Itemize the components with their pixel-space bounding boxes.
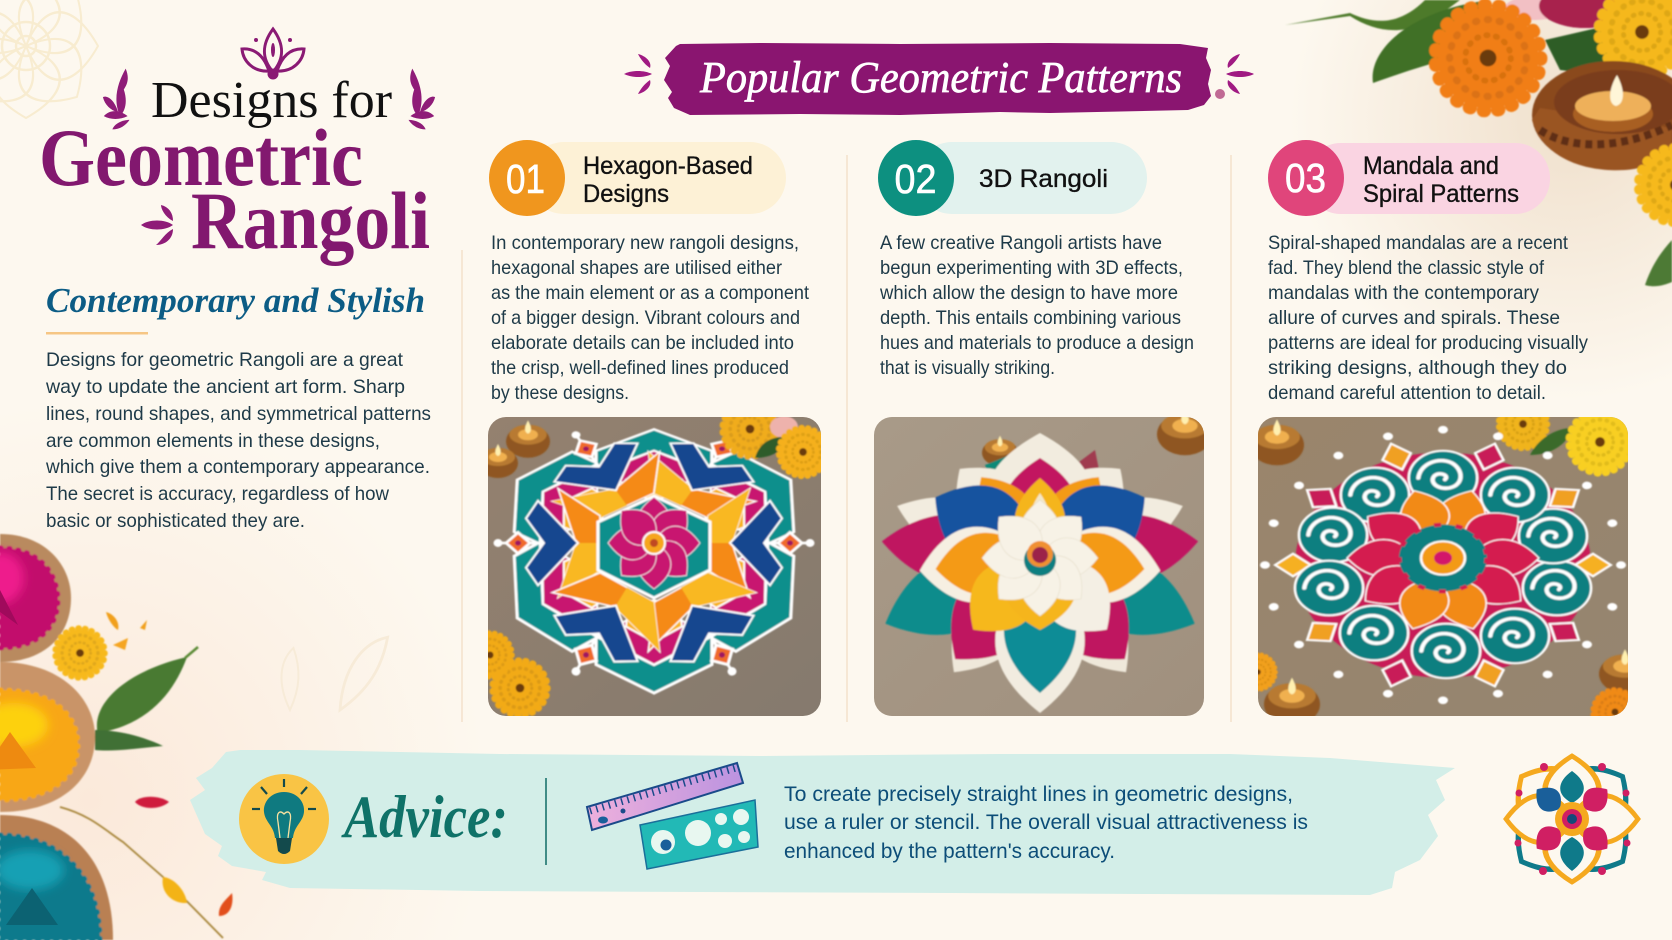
heading: Geometric: Geometric [39, 112, 363, 203]
text: 3D description: that is visually striking. [880, 357, 1055, 379]
text: hexagon description: elaborate details can be included into [491, 332, 794, 354]
subtitle underline [46, 332, 148, 334]
text: 3D description [879, 232, 1194, 379]
image: spiral mandala rangoli [1258, 417, 1628, 716]
icon: left spray [624, 54, 652, 94]
watermark mandala [0, 0, 101, 121]
faint leaf watermark [264, 637, 388, 710]
icon: left flourish [103, 69, 130, 129]
text: spiral description: patterns are ideal for producing visually [1268, 332, 1588, 354]
heading: Hexagon-Based Designs [583, 152, 753, 208]
pill: header 02 [916, 142, 1147, 214]
icon: lotus ornament [242, 29, 304, 78]
heading: Mandala and Spiral Patterns [1363, 152, 1519, 208]
heading: Rangoli: Rangoli [191, 175, 430, 266]
text: spiral description: striking designs, although they do [1268, 357, 1567, 379]
intro text: are common elements in these designs, [46, 430, 380, 452]
text: advice [784, 782, 1308, 863]
title block [39, 29, 435, 266]
powder highlights [0, 552, 64, 890]
text: advice: enhanced by the pattern's accuracy. [784, 839, 1115, 863]
icon: light bulb [239, 774, 329, 864]
text: advice: To create precisely straight lines in geometric designs, [784, 782, 1293, 806]
text: 3D description: hues and materials to produce a design [880, 332, 1194, 354]
banner: Popular Geometric Patterns [624, 43, 1254, 115]
banner: Popular Geometric Patterns: Popular Geometric Patterns [699, 53, 1182, 102]
text: hexagon description: of a bigger design. Vibrant colours and [491, 307, 800, 329]
heading: Mandala and Spiral Patterns: Mandala and [1363, 152, 1499, 180]
heading: Designs for: Designs for [151, 72, 392, 129]
intro text: way to update the ancient art form. Sharp [45, 376, 405, 398]
panel: 02 3D Rangoli [871, 140, 1213, 716]
text: 3D description: which allow the design to have more [879, 282, 1178, 304]
badge: 03 [1268, 140, 1344, 216]
heading: Mandala and Spiral Patterns: Spiral Patterns [1363, 180, 1519, 208]
heading: Hexagon-Based Designs: Designs [583, 180, 669, 208]
text: spiral description: mandalas with the contemporary [1268, 282, 1539, 304]
icon: small rangoli mandala [1502, 753, 1642, 885]
intro text: which give them a contemporary appearance. [45, 456, 430, 478]
intro text [45, 349, 431, 532]
text: spiral description: fad. They blend the classic style of [1268, 257, 1545, 279]
text: hexagon description: by these designs. [491, 382, 629, 404]
intro text: basic or sophisticated they are. [46, 510, 305, 532]
icon: small flourish [141, 205, 173, 245]
image: 3D rangoli [871, 408, 1213, 716]
text: 3D description: A few creative Rangoli artists have [880, 232, 1162, 254]
powder peaks [0, 590, 58, 925]
text: hexagon description [491, 232, 810, 404]
number: 02: 02 [894, 156, 936, 202]
pill: header 03 [1306, 143, 1550, 214]
text: hexagon description: In contemporary new rangoli designs, [491, 232, 799, 254]
text: hexagon description: the crisp, well-defined lines produced [491, 357, 789, 379]
decoration: bottom-left colour powder bowls [0, 534, 232, 940]
icon: right flourish [408, 69, 435, 129]
icon: ruler and stencil [587, 763, 758, 869]
subtitle: Contemporary and Stylish [46, 281, 425, 320]
intro text: lines, round shapes, and symmetrical patterns [46, 403, 431, 425]
text: 3D description: begun experimenting with 3D effects, [880, 257, 1183, 279]
text: hexagon description: hexagonal shapes are utilised either [491, 257, 782, 279]
intro text: The secret is accuracy, regardless of how [46, 483, 390, 505]
icon: right spray [1215, 54, 1254, 99]
text: spiral description [1268, 232, 1588, 404]
intro text: Designs for geometric Rangoli are a great [46, 349, 404, 371]
heading: Hexagon-Based Designs: Hexagon-Based [583, 152, 753, 180]
text: 3D description: depth. This entails combining various [880, 307, 1181, 329]
text: hexagon description: as the main element or as a component [491, 282, 810, 304]
text: advice: use a ruler or stencil. The overall visual attractiveness is [784, 810, 1308, 834]
decoration: top-right flowers and diya [1285, 0, 1672, 286]
panel: 03 Mandala and Spiral Patterns [1258, 140, 1628, 716]
heading: Advice: Advice: [340, 784, 508, 850]
heading: 3D Rangoli: 3D Rangoli [979, 165, 1108, 193]
image: hexagon rangoli [488, 417, 821, 716]
number: 01: 01 [506, 156, 545, 202]
panel: advice banner [190, 750, 1455, 895]
text: spiral description: demand careful attention to detail. [1268, 382, 1546, 404]
badge: 01 [489, 140, 565, 216]
text: spiral description: allure of curves and spirals. These [1268, 307, 1560, 329]
text: spiral description: Spiral-shaped mandalas are a recent [1268, 232, 1569, 254]
number: 03: 03 [1285, 155, 1326, 201]
pill: header 01 [528, 142, 786, 214]
badge: 02 [878, 140, 954, 216]
panel: 01 Hexagon-Based Designs [468, 140, 827, 716]
